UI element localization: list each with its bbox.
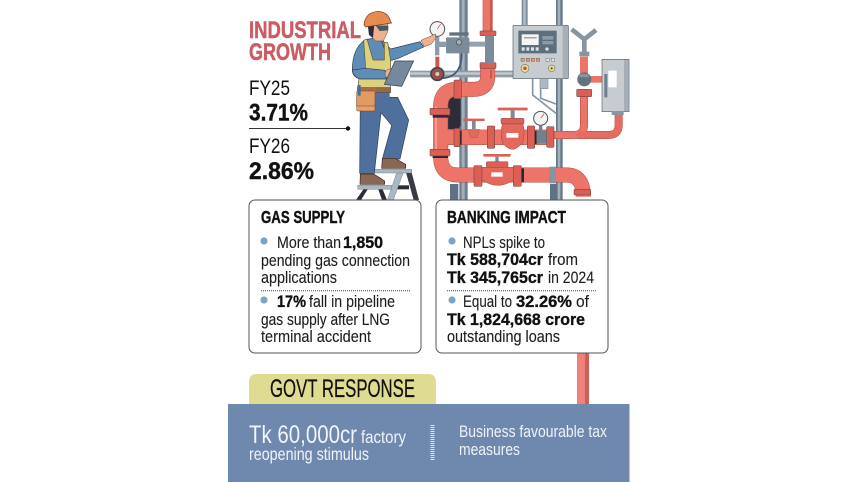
gas bullet two: gas supply after LNG	[261, 310, 390, 329]
title: GROWTH	[249, 39, 331, 66]
govt response tab	[249, 374, 436, 405]
FY26 value: 2.86%	[249, 158, 314, 185]
gas supply heading: GAS SUPPLY	[261, 207, 345, 227]
tax measures text: measures	[459, 440, 520, 459]
grey support pipes	[410, 0, 563, 200]
gas bullet one: 1,850	[343, 233, 383, 252]
title: INDUSTRIAL	[249, 17, 361, 44]
lower valve	[482, 154, 513, 185]
clipboard	[384, 61, 414, 86]
lower arm	[352, 68, 386, 79]
tab heading: GOVT RESPONSE	[270, 375, 415, 403]
gas bullet two: 17%	[277, 292, 306, 311]
gas bullet one	[260, 233, 410, 287]
stimulus text: factory	[361, 427, 406, 447]
pressure gauge middle	[534, 111, 548, 143]
panel: banking impact	[436, 200, 608, 353]
dark wall gap	[444, 96, 461, 129]
banking bullet two: of	[576, 292, 589, 311]
banking bullet two: Tk 1,824,668 crore	[447, 310, 585, 329]
banking bullet one: from	[548, 250, 578, 269]
shirt and sleeve	[352, 37, 389, 80]
gas bullet two: terminal accident	[261, 327, 371, 346]
gas bullet two	[260, 292, 395, 346]
control panel	[513, 25, 568, 79]
red pipe network	[436, 0, 619, 197]
panel: gas supply	[249, 200, 421, 353]
govt response band	[228, 404, 630, 482]
conduits below panel	[533, 79, 556, 113]
tax measures text	[459, 422, 607, 459]
banking bullet one: Tk 588,704cr	[447, 250, 543, 269]
large middle valve	[498, 108, 528, 149]
stimulus text: reopening stimulus	[249, 444, 369, 464]
belt and pouch	[357, 85, 391, 106]
pipe between banking box and band	[577, 352, 589, 404]
banking bullet two: outstanding loans	[447, 327, 560, 346]
boots	[360, 158, 406, 184]
illustration: pipework and control panel	[410, 0, 629, 200]
trousers top	[359, 92, 390, 106]
gas bullet one: applications	[261, 268, 337, 287]
grey sleeve and stubs	[450, 167, 557, 200]
banking bullet one	[447, 233, 594, 287]
hand reaching	[421, 34, 436, 47]
tax measures text: Business favourable tax	[459, 422, 607, 441]
electrical box	[602, 59, 629, 115]
illustration: worker upper body	[352, 11, 436, 106]
banking bullet one: NPLs spike to	[463, 233, 545, 252]
FY25 label: FY25	[249, 77, 290, 100]
small valve	[463, 119, 485, 137]
gas bullet one: pending gas connection	[261, 251, 410, 270]
head and hard hat	[364, 11, 392, 41]
banking bullet two: 32.26%	[516, 292, 572, 311]
gas bullet two: fall in pipeline	[309, 292, 395, 311]
safety vest	[358, 39, 391, 88]
stimulus text: Tk 60,000cr	[249, 421, 357, 449]
growth figures	[249, 77, 314, 185]
ladder	[356, 169, 419, 200]
right arm and sleeve	[380, 38, 424, 62]
FY26 label: FY26	[249, 135, 290, 158]
illustration: worker lower body on ladder	[356, 97, 419, 200]
banking bullet one: in 2024	[548, 268, 594, 287]
FY25 value: 3.71%	[249, 100, 308, 126]
banking bullet one: Tk 345,765cr	[447, 268, 543, 287]
banking heading: BANKING IMPACT	[447, 207, 566, 227]
tool pouch bottom	[357, 97, 375, 111]
title	[249, 17, 361, 66]
gas bullet one: More than	[277, 233, 341, 252]
banking bullet two	[447, 292, 589, 346]
Y nozzle fitting	[572, 29, 596, 86]
pipe flanges	[430, 31, 592, 195]
upper valve assembly and gauge	[430, 22, 494, 80]
trousers	[360, 97, 409, 173]
stimulus text	[249, 421, 406, 464]
holding hand	[385, 69, 395, 79]
banking bullet two: Equal to	[463, 292, 512, 311]
dark pipe joints	[433, 115, 537, 182]
